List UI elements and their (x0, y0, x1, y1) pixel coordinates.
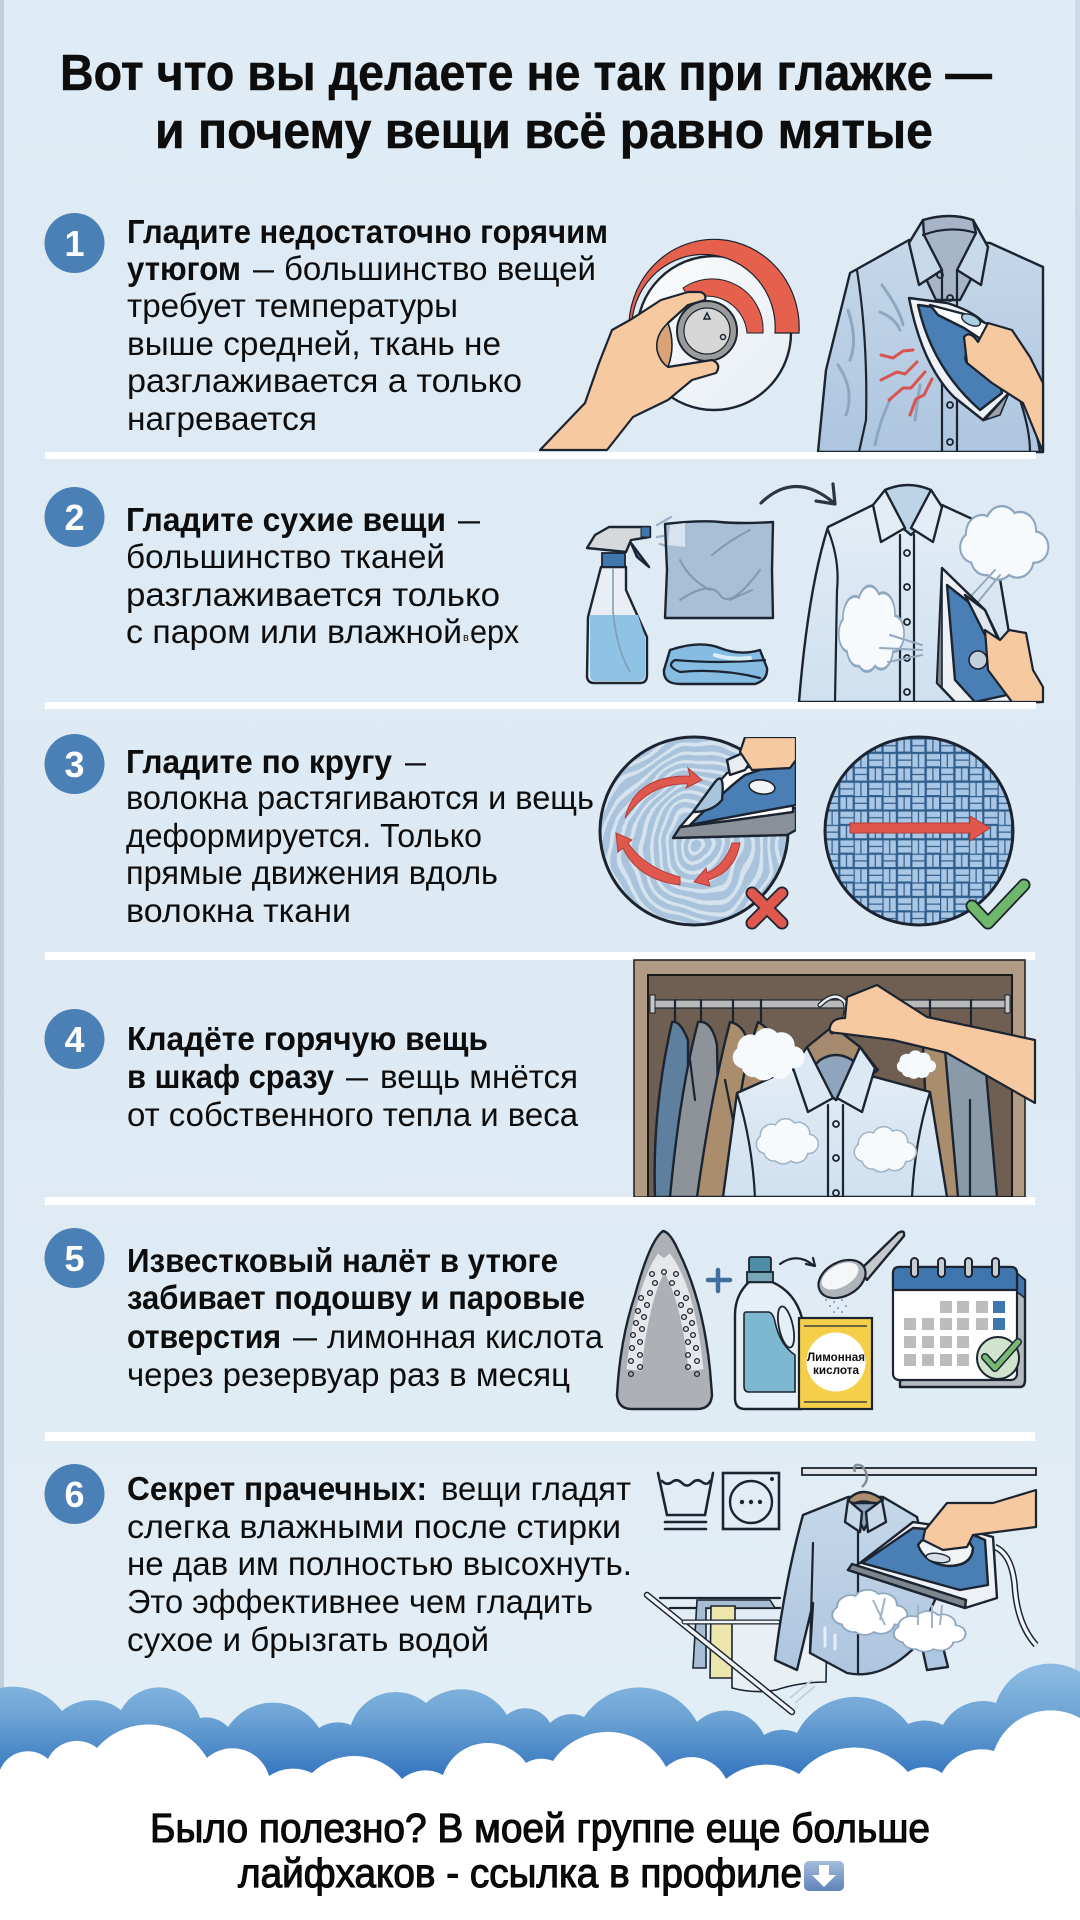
panel: step 5 (44, 1228, 1025, 1409)
panel: step 1 (44, 213, 1043, 452)
number badge 5 (44, 1228, 104, 1288)
text block 3 (126, 743, 594, 929)
arrow: straight (850, 816, 990, 841)
text block 3: Гладите по кругу (126, 743, 393, 780)
icon: citric acid packet (799, 1318, 872, 1409)
text block 1 (127, 213, 608, 437)
icon: wash symbol (658, 1473, 713, 1529)
panel: step 6 (44, 1464, 1036, 1712)
icon: down arrow emoji (804, 1861, 844, 1891)
divider 3 (45, 952, 1035, 960)
text block 6: не дав им полностью высохнуть. (127, 1545, 632, 1582)
text block 4: от собственного тепла и веса (127, 1096, 579, 1133)
icon: bottle (735, 1257, 802, 1409)
icon: red cross (752, 893, 782, 923)
text block 3: прямые движения вдоль (126, 854, 498, 891)
arrow: curved (761, 484, 835, 504)
icon: citric acid packet: кислота (813, 1365, 860, 1377)
text block 4: вещь мнётся (380, 1058, 578, 1095)
steam clouds (733, 1028, 936, 1172)
icon: iron soleplate with limescale (617, 1231, 712, 1409)
icon: clothes line (802, 1468, 1036, 1475)
text block 1: Гладите недостаточно горячим (127, 213, 608, 250)
icon: iron (673, 737, 796, 838)
text block 2: с паром или влажной (126, 613, 462, 650)
icon: calendar with check (893, 1258, 1025, 1387)
footer call to action: Было полезно? В моей группе еще больше (150, 1805, 930, 1851)
divider 1 (45, 452, 1036, 459)
number badge 1 (44, 213, 104, 273)
text block 1: разглаживается а только (127, 362, 522, 399)
text block 5 (127, 1242, 604, 1393)
text block 2: Гладите сухие вещи (126, 501, 446, 538)
divider 2 (45, 702, 1036, 709)
title: Вот что вы делаете не так при глажке — (60, 44, 992, 101)
text block 5: Известковый налёт в утюге (127, 1242, 558, 1279)
text block 1: выше средней, ткань не (127, 325, 501, 362)
icon: tumble dryer symbol (723, 1473, 779, 1529)
text block 2: — (458, 501, 480, 538)
panel: step 3 (44, 734, 1030, 930)
text block 1: большинство вещей (284, 250, 596, 287)
text block 6: вещи гладят (441, 1470, 631, 1507)
text block 4: в шкаф сразу (127, 1058, 335, 1095)
text block 1: утюгом (127, 250, 241, 287)
icon: wardrobe with hot shirt (634, 960, 1035, 1197)
icon: spray bottle (587, 517, 680, 683)
icon: damp cloth and towel (664, 521, 773, 684)
icon: straight motion along weave (right) (825, 737, 1024, 925)
icon: spoon with powder (812, 1232, 904, 1313)
text block 6: сухое и брызгать водой (127, 1621, 489, 1658)
clothes rail (650, 995, 1010, 1013)
text block 5: отверстия (127, 1318, 281, 1355)
text block 1: — (253, 250, 274, 287)
text block 6: Это эффективнее чем гладить (127, 1583, 593, 1620)
number badge 4: 4 (64, 1019, 85, 1060)
text block 2: в (463, 632, 469, 644)
hanging clothes (655, 1000, 997, 1197)
text block 4: Кладёте горячую вещь (127, 1020, 488, 1057)
text block 6: слегка влажными после стирки (127, 1508, 621, 1545)
text block 3: — (405, 743, 426, 780)
icon: green check (972, 885, 1024, 923)
footer clouds (0, 1664, 1080, 1920)
number badge 2 (44, 487, 104, 547)
title: и почему вещи всё равно мятые (155, 102, 933, 159)
text block 5: лимонная кислота (327, 1318, 604, 1355)
text block 5: забивает подошву и паровые (127, 1279, 585, 1316)
number badge 5: 5 (64, 1238, 85, 1279)
icon: drying rack with clothes (647, 1595, 827, 1712)
text block 6: Секрет прачечных: (127, 1470, 427, 1507)
title (60, 44, 992, 159)
number badge 3: 3 (64, 744, 85, 785)
number badge 2: 2 (64, 497, 85, 538)
text block 2: разглаживается только (126, 576, 500, 613)
icon: shirt on hanger with iron (775, 1465, 1036, 1674)
number badge 3 (44, 734, 104, 794)
icon: temperature dial with hand (540, 239, 799, 450)
iron and cord (995, 1547, 1036, 1645)
footer call to action (150, 1805, 930, 1896)
panel: step 2 (44, 484, 1048, 702)
text block 1: нагревается (127, 400, 317, 437)
text block 1: требует температуры (127, 287, 458, 324)
text block 4: — (346, 1058, 368, 1095)
arrows: circular motion (616, 768, 740, 886)
text block 5: — (293, 1318, 317, 1355)
panel: step 4 (44, 960, 1035, 1197)
icon: citric acid packet: Лимонная (807, 1352, 865, 1364)
number badge 4 (44, 1009, 104, 1069)
text block 3: волокна ткани (126, 892, 351, 929)
number badge 6 (44, 1464, 104, 1524)
text block 6 (127, 1470, 632, 1658)
text block 2: большинство тканей (126, 538, 445, 575)
light shirt on hanger (723, 1026, 947, 1197)
text block 4 (127, 1020, 579, 1133)
number badge 1: 1 (64, 223, 85, 264)
text block 3: деформируется. Только (126, 817, 482, 854)
icon: shirt with steam iron (799, 485, 1048, 702)
text block 3: волокна растягиваются и вещь (126, 779, 594, 816)
icon: circular motion on distorted fabric (wrong) (598, 736, 796, 930)
divider 5 (45, 1432, 1035, 1441)
divider 4 (45, 1197, 1035, 1205)
icon: wrinkled shirt with iron (818, 216, 1043, 452)
footer call to action: лайфхаков - ссылка в профиле (238, 1850, 802, 1896)
hand with hanger (820, 985, 1035, 1103)
plus sign (708, 1270, 730, 1291)
text block 2: ерх (470, 613, 519, 650)
number badge 6: 6 (64, 1474, 85, 1515)
arrow: to spoon (780, 1258, 815, 1266)
text block 2 (126, 501, 519, 650)
text block 5: через резервуар раз в месяц (127, 1356, 570, 1393)
